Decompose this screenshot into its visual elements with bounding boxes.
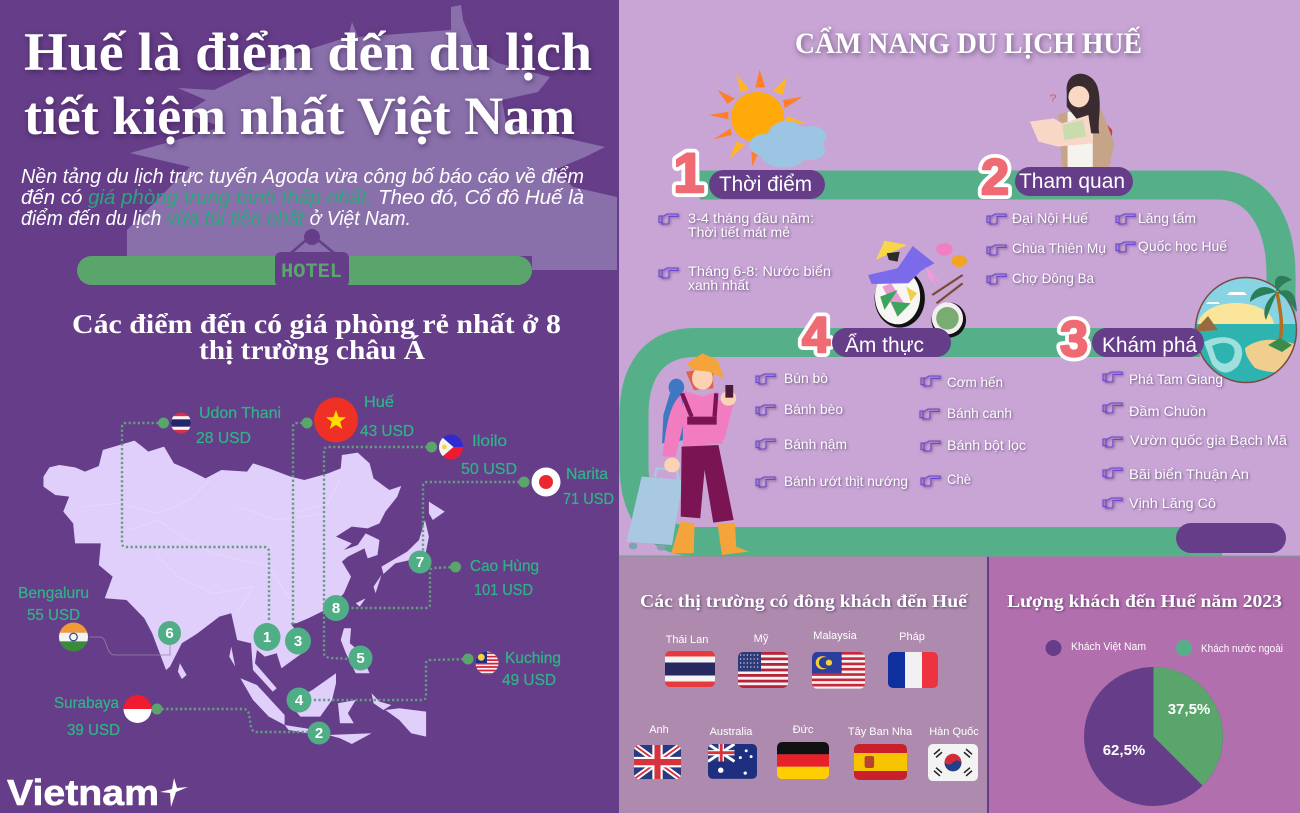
heading: cheapest destinations: Các điểm đến có giá phòng rẻ nhất ở 8: [72, 309, 561, 339]
labels: destination prices: Iloilo: [472, 433, 507, 450]
heading: visitors 2023: Lượng khách đến Huế năm 2023: [1007, 591, 1282, 611]
list: best time: [659, 210, 831, 293]
panel: guide background: [619, 0, 1300, 556]
numbered map markers: 3: [294, 633, 302, 650]
divider: [987, 556, 989, 813]
labels: destination prices: 101 USD: [474, 582, 533, 599]
step 3 number: 3: [1060, 311, 1088, 367]
labels: destination prices: Surabaya: [54, 695, 119, 712]
heading: source markets: Các thị trường có đông khách đến Huế: [640, 591, 968, 611]
step 1 number: 1: [673, 141, 705, 204]
step 3 number: 3: [1060, 311, 1088, 367]
list: cuisine: [756, 370, 1026, 489]
route: Cao Hung: [348, 567, 455, 608]
list: discover: Đầm Chuồn: [1129, 403, 1206, 419]
step 4 pill: cuisine: Ẩm thực: [845, 334, 924, 357]
step 4 pill: cuisine: [832, 328, 951, 357]
list: cuisine: Chè: [947, 471, 971, 487]
icon: woman with map: [1030, 74, 1114, 172]
labels: destination prices: 39 USD: [67, 722, 120, 739]
list: discover: Vườn quốc gia Bạch Mã: [1130, 432, 1287, 448]
list: discover: [1103, 371, 1287, 511]
text block: intro: đến có giá phòng trung bình thấp nhất. Theo đó, Cố đô Huế là: [21, 187, 584, 209]
list: sightseeing: Quốc học Huế: [1138, 238, 1227, 254]
heading: cheapest destinations: [72, 309, 561, 365]
flag: Australia: [708, 726, 757, 779]
labels: destination prices: 71 USD: [563, 491, 614, 508]
numbered map markers: 4: [295, 692, 304, 709]
text block: intro: [21, 166, 584, 230]
numbered map markers: [158, 550, 432, 744]
icon: woman with map: ?: [1049, 93, 1057, 104]
list: cuisine: Cơm hến: [947, 374, 1003, 390]
labels: destination prices: 55 USD: [27, 607, 80, 624]
legend: Khách nước ngoài: [1201, 643, 1283, 655]
flag: Japan circle: [532, 468, 560, 496]
step 2 number: 2: [981, 149, 1009, 205]
step 2 pill: sightseeing: Tham quan: [1019, 170, 1125, 193]
flag: South Korea: Hàn Quốc: [929, 726, 979, 738]
list: sightseeing: Lăng tẩm: [1138, 210, 1196, 226]
flag: UK: Anh: [649, 724, 669, 736]
flag: South Korea: [928, 726, 979, 781]
icon: person with food: [868, 241, 967, 338]
route: Iloilo: [324, 447, 432, 659]
numbered map markers: 2: [315, 725, 323, 742]
step 1 number: 1: [673, 141, 705, 204]
heading: travel guide: CẨM NANG DU LỊCH HUẾ: [795, 26, 1142, 60]
numbered map markers: 8: [332, 600, 340, 617]
flag: USA: Mỹ: [754, 633, 769, 645]
title: Huế là điểm đến du lịch: [24, 22, 592, 82]
labels: destination prices: Cao Hùng: [470, 558, 539, 575]
flag: USA: [738, 633, 788, 688]
route: Kuching: [312, 659, 468, 700]
flag: Thailand: Thái Lan: [666, 634, 708, 646]
step 3 pill: discover: [1092, 328, 1204, 357]
map of Asia: [43, 441, 445, 744]
legend: Khách Việt Nam: [1071, 641, 1146, 653]
labels: destination prices: Narita: [566, 466, 608, 483]
list: discover: Phá Tam Giang: [1129, 371, 1223, 387]
end pill: [1176, 523, 1286, 553]
pie chart: [1084, 667, 1223, 806]
flag: UK: [634, 724, 681, 779]
title: [24, 22, 592, 146]
logo: Vietnam+: Vietnam: [7, 772, 159, 813]
list: sightseeing: Chợ Đông Ba: [1012, 270, 1094, 286]
hotel bar: [77, 256, 532, 285]
text block: intro: điểm đến du lịch vừa túi tiền nhất ở Việt Nam.: [21, 208, 411, 230]
list: best time: Thời tiết mát mẻ: [688, 224, 790, 240]
pie chart: 62,5%: [1103, 742, 1145, 759]
icon: Hue citadel silhouette: [127, 5, 617, 270]
icon: hotel sign: HOTEL: [281, 261, 342, 284]
list: cuisine: Bánh bèo: [784, 401, 843, 417]
route nodes: [152, 418, 530, 714]
flag: India circle: [59, 622, 88, 652]
flag: Spain: Tây Ban Nha: [848, 726, 913, 738]
flag: Thailand: [665, 634, 715, 687]
labels: destination prices: 50 USD: [461, 461, 517, 478]
route: Bengaluru: [89, 637, 170, 655]
list: discover: Vịnh Lăng Cô: [1129, 495, 1216, 511]
numbered map markers: 5: [356, 650, 365, 667]
list: cuisine: Bún bò: [784, 370, 828, 386]
panel: left background: [0, 0, 619, 813]
list: sightseeing: Đại Nội Huế: [1012, 210, 1088, 226]
flag: Germany: Đức: [793, 724, 814, 736]
flag: Thailand circle: [171, 412, 191, 434]
flag: Australia: Australia: [710, 726, 753, 738]
list: cuisine: Bánh nậm: [784, 436, 847, 452]
route: Hue: [293, 423, 307, 627]
flag: Spain: [848, 726, 913, 780]
list: sightseeing: Chùa Thiên Mụ: [1012, 240, 1106, 256]
list: best time: Tháng 6-8: Nước biển: [688, 263, 831, 279]
step 4 number: 4: [802, 307, 830, 363]
list: best time: 3-4 tháng đầu năm:: [688, 210, 814, 226]
step 3 pill: discover: Khám phá: [1102, 334, 1197, 357]
panel: source markets: [619, 556, 988, 813]
flag: Malaysia: Malaysia: [813, 630, 858, 642]
route: Narita: [423, 482, 524, 553]
text block: intro: Nền tảng du lịch trực tuyến Agoda vừa công bố báo cáo về điểm: [21, 166, 584, 188]
list: best time: xanh nhất: [688, 277, 749, 293]
route: Udon Thani: [122, 423, 269, 622]
route band: lower: [634, 342, 1222, 542]
title: tiết kiệm nhất Việt Nam: [24, 86, 575, 146]
step 1 pill: time: Thời điểm: [719, 173, 812, 196]
legend: [1046, 640, 1283, 656]
flag: Philippines circle: [439, 434, 463, 460]
labels: destination prices: Bengaluru: [18, 585, 89, 602]
heading: cheapest destinations: thị trường châu Á: [199, 335, 426, 365]
numbered map markers: 1: [263, 629, 271, 646]
route band: top: [700, 185, 1281, 320]
labels: destination prices: Udon Thani: [199, 405, 281, 422]
labels: destination prices: Huế: [364, 394, 394, 411]
labels: destination prices: Kuching: [505, 650, 561, 667]
list: discover: Bãi biển Thuận An: [1129, 466, 1249, 482]
icon: sun and cloud: [709, 69, 826, 168]
list: cuisine: Bánh canh: [947, 405, 1012, 421]
flag: Vietnam circle: [314, 398, 358, 442]
panel: visitors 2023: [988, 556, 1300, 813]
numbered map markers: 6: [165, 625, 174, 642]
icon: traveller with suitcase: [627, 353, 749, 555]
flag: Malaysia: [812, 630, 865, 689]
list: cuisine: Bánh bột lọc: [947, 437, 1026, 453]
icon: hotel sign: [275, 229, 349, 287]
route: Surabaya: [157, 709, 308, 732]
flag: Malaysia circle: [476, 652, 498, 674]
step 4 number: 4: [802, 307, 830, 363]
step 1 pill: time: [709, 170, 825, 199]
labels: destination prices: 49 USD: [502, 672, 556, 689]
flag: Indonesia circle: [124, 695, 152, 723]
list: sightseeing: [987, 210, 1227, 286]
labels: destination prices: 28 USD: [196, 430, 251, 447]
labels: destination prices: [18, 394, 614, 739]
flag: Germany: [777, 724, 829, 779]
labels: destination prices: 43 USD: [360, 423, 414, 440]
numbered map markers: 7: [416, 554, 424, 571]
step 2 number: 2: [981, 149, 1009, 205]
flag: France: Pháp: [899, 631, 925, 643]
flag: France: [888, 631, 938, 688]
icon: beach scene: [1190, 275, 1300, 384]
pie chart: 37,5%: [1168, 701, 1210, 718]
list: cuisine: Bánh ướt thịt nướng: [784, 473, 908, 489]
